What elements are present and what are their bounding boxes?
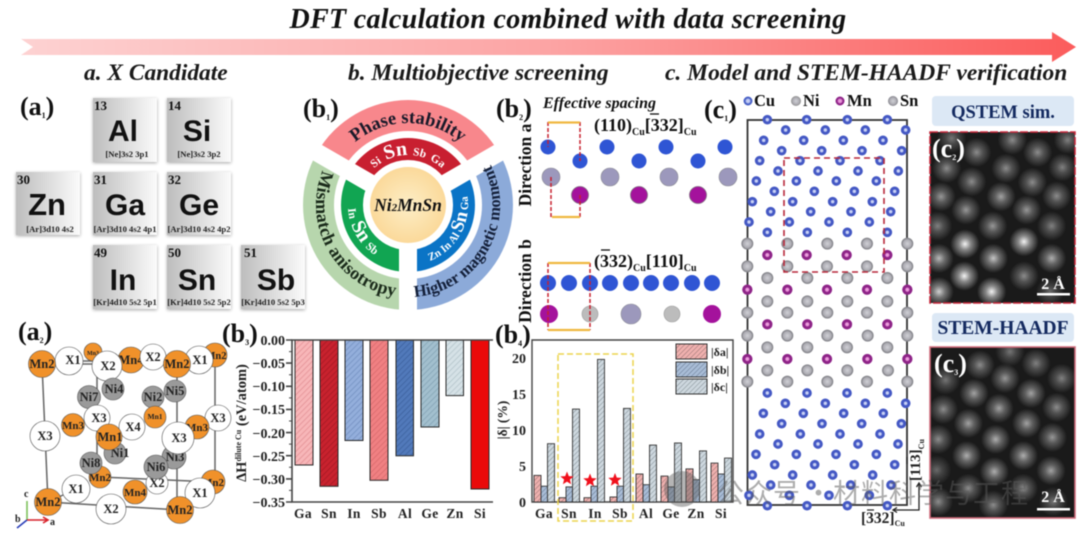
cell: Zn: [Ar]3d10 4s2 bbox=[26, 224, 74, 234]
label: c1: ) bbox=[728, 95, 737, 124]
x labels: Sb bbox=[371, 506, 387, 521]
heading: b. Multiobjective screening: b. Multiobjective screening bbox=[348, 60, 609, 86]
cell: Sn: [Kr]4d10 5s2 5p2 bbox=[167, 297, 231, 307]
label: c2: (c bbox=[932, 134, 952, 163]
atoms: X2 bbox=[145, 350, 161, 364]
label: a1: ) bbox=[46, 92, 54, 121]
text: plane a: [332] bbox=[645, 115, 684, 135]
text: direction a: Direction a bbox=[515, 123, 535, 206]
panel: b4 lattice mismatch bar chart bbox=[495, 320, 733, 521]
cell: Ge: [Ar]3d10 4s2 4p2 bbox=[167, 224, 231, 234]
cell: Ga bbox=[93, 172, 157, 235]
x labels bbox=[294, 506, 486, 521]
cell: Sn: 50 bbox=[168, 245, 181, 260]
cell: Sb bbox=[241, 245, 305, 309]
x labels: In bbox=[347, 506, 361, 521]
watermark: 公众号 bbox=[717, 472, 801, 511]
x labels: Zn bbox=[446, 506, 464, 521]
unit cell lines bbox=[42, 355, 215, 510]
x labels: Ge bbox=[421, 506, 439, 521]
outer sector: mismatch anisotropy bbox=[303, 152, 408, 310]
text: plane b: (332) bbox=[594, 251, 633, 271]
elements: In Sn Sb: In Sn Sb bbox=[347, 208, 378, 255]
label: b2: ) bbox=[523, 94, 532, 123]
cell: Ga: Ga bbox=[105, 189, 145, 222]
scale bar: 2 angstrom bbox=[1037, 275, 1070, 296]
label: 113 direction: Cu bbox=[917, 439, 926, 449]
cell: Al bbox=[93, 98, 157, 162]
label: c3: ) bbox=[958, 349, 967, 378]
cell: Al: 13 bbox=[94, 98, 108, 113]
highlight: dashed box bbox=[558, 354, 633, 521]
label: 113 direction bbox=[907, 439, 926, 481]
cell: Ge: 32 bbox=[168, 172, 181, 187]
y axis title: (eV/atom) bbox=[234, 364, 250, 430]
panel: b1 screening wheel bbox=[302, 94, 514, 310]
label: b3: ) bbox=[249, 319, 258, 348]
watermark: 材料科学与工程 bbox=[833, 472, 1029, 511]
atoms: X1 bbox=[192, 486, 208, 500]
legend: |δb| bbox=[711, 363, 729, 377]
atoms: Mn3 bbox=[62, 420, 84, 432]
cell: Sb: [Kr]4d10 5s2 5p3 bbox=[241, 297, 305, 307]
atoms: Mn2 bbox=[36, 495, 60, 509]
atoms: Ni8 bbox=[82, 456, 100, 470]
axes bbox=[286, 340, 493, 502]
heading: c. Model and STEM-HAADF verification: c. Model and STEM-HAADF verification bbox=[665, 60, 1067, 86]
cell: Si: [Ne]3s2 3p2 bbox=[177, 149, 221, 159]
x labels: Al bbox=[398, 506, 412, 521]
atoms: X3 bbox=[210, 411, 226, 425]
icons: red stars bbox=[560, 472, 622, 486]
cell: Ga: [Ar]3d10 4s2 4p1 bbox=[93, 224, 157, 234]
atoms: Mn2 bbox=[202, 477, 224, 489]
heading: a. X Candidate: a. X Candidate bbox=[84, 60, 228, 86]
atoms: Mn3 bbox=[186, 422, 208, 434]
inner sector: red bbox=[350, 138, 466, 182]
title: DFT calculation combined with data screening bbox=[289, 4, 846, 35]
atoms: X1 bbox=[65, 353, 81, 367]
y tick labels: −0.10 bbox=[253, 380, 285, 395]
text: direction b: Direction b bbox=[515, 239, 535, 323]
cell: Si bbox=[167, 98, 231, 162]
y tick labels bbox=[512, 352, 526, 511]
text: plane b: Cu bbox=[633, 263, 646, 274]
cell: Si: Si bbox=[183, 115, 211, 148]
label: b3: (b bbox=[222, 319, 245, 348]
outer sector: phase stability bbox=[317, 100, 499, 168]
label: c1: (c bbox=[704, 95, 724, 124]
y tick labels: −0.15 bbox=[253, 403, 285, 418]
legend: atom types: Sn bbox=[900, 91, 918, 110]
label: phase stability: Phase stability bbox=[348, 112, 466, 142]
label: a1: (a bbox=[20, 92, 42, 121]
label: a2: (a bbox=[18, 317, 40, 346]
atoms: upper Cu bbox=[746, 116, 909, 236]
label: c3: 3 bbox=[954, 368, 958, 377]
atoms: X2 bbox=[100, 359, 116, 373]
cell: Ge: Ge bbox=[179, 189, 219, 222]
text: plane a: Cu bbox=[684, 127, 697, 138]
y tick labels bbox=[253, 334, 285, 511]
image border bbox=[930, 132, 1075, 303]
atoms: Ni3 bbox=[166, 450, 184, 464]
label: c1: 1 bbox=[724, 114, 728, 123]
cell: In bbox=[93, 245, 157, 309]
text: plane a: (110) bbox=[594, 115, 632, 135]
atoms: Mn1 bbox=[98, 430, 122, 444]
text: plane b: Cu bbox=[684, 263, 697, 274]
x labels bbox=[535, 506, 727, 521]
watermark: · bbox=[805, 472, 832, 511]
axes triad bbox=[15, 489, 55, 528]
atoms: Mn2 bbox=[206, 351, 226, 362]
label: b1: ) bbox=[330, 94, 339, 123]
elements: Si Sn Sb Ga: Si Sn Sb Ga bbox=[370, 144, 445, 168]
x labels: Si bbox=[474, 506, 486, 521]
legend: |δa| bbox=[711, 345, 729, 359]
panel: c1 atomic model bbox=[704, 91, 926, 528]
atoms: Ni4 bbox=[105, 382, 124, 396]
atoms: Mn bbox=[744, 251, 911, 363]
atoms: Mn4 bbox=[124, 487, 146, 499]
axes triad: c bbox=[24, 489, 29, 500]
cell: Zn: 30 bbox=[17, 172, 30, 187]
scale bar: 2 angstrom bbox=[1037, 488, 1070, 510]
core: Ni2MnSn bbox=[370, 167, 446, 243]
y tick labels: 20 bbox=[512, 352, 526, 367]
legend: atom types: Mn bbox=[847, 91, 872, 110]
label: b2: (b bbox=[496, 94, 519, 123]
y tick labels: 10 bbox=[512, 424, 526, 439]
panel: c2 QSTEM simulation bbox=[923, 96, 1080, 306]
axes triad: b bbox=[15, 514, 21, 525]
x labels: Zn bbox=[687, 506, 705, 521]
legend: atom types: Cu bbox=[754, 91, 775, 110]
x labels: Ga bbox=[535, 506, 553, 521]
panel: c3 STEM-HAADF experiment bbox=[922, 313, 1076, 520]
image border bbox=[930, 347, 1075, 518]
cell: Sn bbox=[167, 245, 231, 309]
cell: Al: [Ne]3s2 3p1 bbox=[105, 149, 149, 159]
region box: red dashed bbox=[784, 158, 884, 272]
cell: Ga: 31 bbox=[94, 172, 107, 187]
panel: b3 formation enthalpy bar chart bbox=[222, 319, 493, 521]
atoms: X3 bbox=[171, 431, 187, 445]
x labels: Al bbox=[639, 506, 653, 521]
atoms: Ni6 bbox=[147, 460, 165, 474]
label: b2: 2 bbox=[519, 113, 523, 122]
cell: Si: 14 bbox=[168, 98, 182, 113]
cell: In: In bbox=[110, 264, 136, 297]
label: b3: 3 bbox=[245, 338, 249, 347]
atoms: direction b bbox=[540, 275, 721, 324]
atoms: Mn2 bbox=[89, 472, 112, 484]
label: a2: ) bbox=[44, 317, 52, 346]
cell: In: [Kr]4d10 5s2 5p1 bbox=[93, 297, 157, 307]
atoms: Mn2 bbox=[164, 357, 190, 371]
label: c2: ) bbox=[956, 134, 965, 163]
scale bar: 2 angstrom: 2 Å bbox=[1041, 488, 1065, 506]
atoms: lower Cu bbox=[746, 390, 909, 509]
label: b4: 4 bbox=[518, 339, 522, 348]
x labels: Si bbox=[715, 506, 727, 521]
cell: Sn: Sn bbox=[178, 264, 216, 297]
cell: In: 49 bbox=[94, 245, 108, 260]
heading: STEM-HAADF: STEM-HAADF bbox=[937, 318, 1069, 339]
label: 332 direction: [332] bbox=[861, 510, 895, 527]
scale bar: 2 angstrom: 2 Å bbox=[1041, 275, 1065, 293]
atoms: Mn2 bbox=[30, 357, 54, 371]
text: plane b: [110] bbox=[646, 251, 684, 271]
cell: Sb: Sb bbox=[257, 264, 295, 297]
cell: Al: Al bbox=[108, 115, 138, 148]
y tick labels: 5 bbox=[519, 460, 526, 475]
x labels: In bbox=[588, 506, 602, 521]
label: b1: 1 bbox=[326, 113, 330, 122]
bars bbox=[295, 340, 489, 489]
label: 332 direction: Cu bbox=[895, 519, 905, 528]
x labels: Ge bbox=[662, 506, 680, 521]
label: a1: 1 bbox=[42, 111, 46, 120]
axes triad: a bbox=[50, 517, 55, 528]
watermark bbox=[664, 471, 1029, 511]
inner sector: blue bbox=[408, 172, 475, 272]
arrow: header gradient bbox=[21, 32, 1076, 62]
panel: a1 periodic table candidates bbox=[16, 92, 305, 309]
model frame bbox=[748, 120, 907, 505]
text: effective spacing: Effective spacing bbox=[542, 95, 656, 112]
x labels: Sn bbox=[561, 506, 577, 521]
inner sector: green bbox=[341, 172, 408, 272]
y tick labels: 15 bbox=[512, 388, 526, 403]
y tick labels: 0 bbox=[519, 496, 526, 511]
atoms: Ni1 bbox=[111, 446, 129, 460]
atoms: X2 bbox=[149, 476, 165, 490]
atoms: X1 bbox=[192, 353, 208, 367]
heading: STEM-HAADF bbox=[932, 313, 1074, 342]
x labels: Sb bbox=[612, 506, 628, 521]
label: 113 direction: [113] bbox=[908, 449, 924, 481]
y tick labels: −0.20 bbox=[253, 427, 285, 442]
cell: Ge bbox=[167, 172, 231, 235]
core: Ni2MnSn: Ni2MnSn bbox=[373, 195, 442, 215]
y tick labels: −0.25 bbox=[253, 450, 285, 465]
cell: Zn bbox=[16, 172, 80, 235]
legend: |δc| bbox=[711, 380, 728, 394]
panel: b2 effective spacing bbox=[496, 94, 737, 330]
text: plane b bbox=[594, 250, 697, 274]
label: higher magnetic moment: Higher magnetic moment bbox=[412, 164, 501, 298]
x labels: Ga bbox=[294, 506, 312, 521]
atoms: direction a bbox=[540, 140, 737, 204]
cell: Zn: Zn bbox=[28, 187, 66, 222]
image: experimental lattice bbox=[930, 347, 1075, 518]
atoms: Ni2 bbox=[144, 390, 162, 404]
frame bbox=[532, 340, 733, 502]
atoms: Mn4 bbox=[118, 353, 144, 367]
y axis title: ΔH bbox=[234, 462, 250, 482]
atoms bbox=[28, 343, 231, 524]
y tick labels: −0.30 bbox=[253, 473, 285, 488]
atoms: Mn3 bbox=[87, 351, 99, 357]
atoms: X3 bbox=[37, 429, 53, 443]
atoms: X4 bbox=[125, 420, 141, 434]
label: c2: 2 bbox=[952, 153, 956, 162]
legend bbox=[676, 344, 729, 394]
label: b4: (b bbox=[495, 320, 518, 349]
text: plane a: Cu bbox=[632, 127, 645, 138]
atoms: Ni and Sn bbox=[742, 238, 913, 387]
atoms: Ni7 bbox=[80, 390, 98, 404]
legend: atom types bbox=[744, 91, 918, 110]
text: plane a bbox=[594, 114, 697, 138]
y tick labels: 0.00 bbox=[260, 334, 285, 349]
label: mismatch anisotropy: Mismatch anisotropy bbox=[315, 170, 397, 300]
heading: QSTEM sim. bbox=[932, 96, 1074, 126]
y tick labels: −0.35 bbox=[253, 496, 285, 511]
cell: Sb: 51 bbox=[244, 245, 257, 260]
direction arrows bbox=[893, 483, 922, 512]
atoms: X2 bbox=[103, 502, 119, 516]
atoms: X3 bbox=[91, 411, 107, 425]
atoms: Mn1 bbox=[148, 412, 163, 421]
y axis title: dilute Cu bbox=[234, 429, 243, 462]
label: b1: (b bbox=[303, 94, 326, 123]
x labels: Sn bbox=[321, 506, 337, 521]
y tick labels: −0.05 bbox=[253, 357, 285, 372]
heading: QSTEM sim.: QSTEM sim. bbox=[951, 103, 1055, 123]
panel: a2 crystal structure bbox=[15, 317, 231, 528]
atoms: Mn2 bbox=[168, 503, 192, 517]
spacing markers bbox=[548, 122, 590, 330]
legend: atom types: Ni bbox=[803, 91, 820, 110]
y axis title: |δ| (%) bbox=[495, 401, 510, 439]
elements: Zn In Al Sn Ga: Zn In Al Sn Ga bbox=[427, 196, 469, 262]
image: simulated lattice bbox=[929, 131, 1076, 304]
label: c3: (c bbox=[934, 349, 954, 378]
label: a2: 2 bbox=[40, 336, 44, 345]
label: b4: ) bbox=[522, 320, 531, 349]
atoms: Ni5 bbox=[166, 384, 184, 398]
bars bbox=[534, 359, 732, 502]
atoms: X1 bbox=[68, 482, 84, 496]
outer sector: higher magnetic moment bbox=[408, 152, 513, 310]
